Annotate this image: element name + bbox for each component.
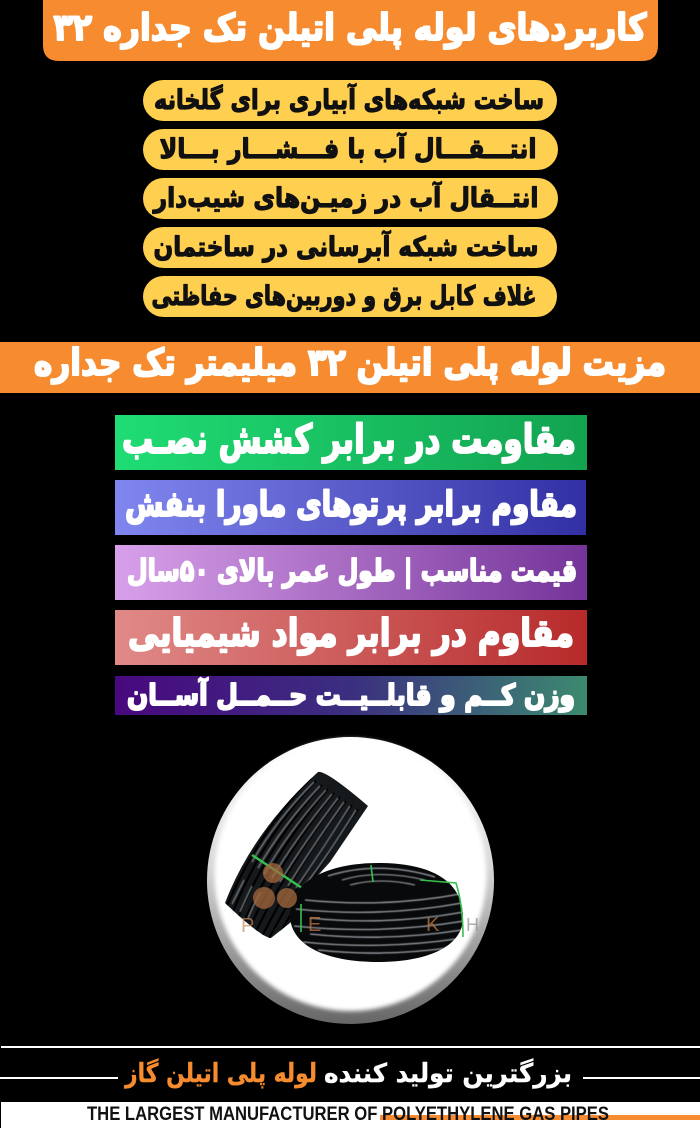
- product photo: pipe coils in round frame: [207, 737, 494, 1024]
- application pill 2: انتـــقـــال آب با فـــشـــار بـــالا: [160, 132, 536, 165]
- application pill 5: [143, 276, 557, 317]
- round bevelled frame: [207, 737, 494, 1024]
- advantage bar: red: [115, 610, 587, 665]
- list of applications: [143, 80, 558, 317]
- application pill 1: ساخت شبکه‌های آبیاری برای گلخانه: [154, 83, 544, 116]
- footer: English tagline strip: THE LARGEST MANUFACTURER OF POLYETHYLENE GAS PIPES: [87, 1104, 609, 1125]
- advantage bar: purple: قیمت مناسب | طول عمر بالای ۵۰سال: [127, 554, 577, 589]
- footer slogan in Persian: بزرگترین تولید کننده: [324, 1058, 572, 1089]
- list of advantages: [115, 415, 587, 715]
- application pill 3: [143, 178, 558, 219]
- advantage bar: indigo to teal: وزن کــم و قابلــیــت حــمــل آســان: [127, 677, 575, 712]
- footer slogan in Persian: [0, 1058, 700, 1089]
- title banner: applications: [43, 0, 658, 61]
- watermark logo: E: [308, 914, 321, 936]
- advantage bar: blue: [115, 480, 586, 535]
- application pill 3: انتــقال آب در زمیـن‌های شیب‌دار: [152, 181, 538, 214]
- application pill 2: [143, 129, 558, 170]
- advantage bar: purple: [115, 545, 587, 600]
- watermark logo: P: [241, 915, 254, 937]
- application pill 5: غلاف کابل برق و دوربین‌های حفاظتی: [152, 281, 536, 312]
- advantage bar: red: مقاوم در برابر مواد شیمیایی: [128, 611, 574, 656]
- green strap on left coil: [252, 855, 332, 890]
- application pill 4: [143, 227, 557, 268]
- application pill 4: ساخت شبکه آبرسانی در ساختمان: [154, 230, 538, 263]
- left tilted coil: [225, 772, 368, 938]
- watermark logo: H: [466, 915, 479, 935]
- footer slogan in Persian: لوله پلی اتیلن گاز: [123, 1058, 317, 1089]
- application pill 1: [143, 80, 557, 121]
- footer: top rule: [1, 1046, 700, 1048]
- footer: English tagline strip: [1, 1102, 700, 1128]
- watermark logo: K: [426, 914, 440, 936]
- watermark logo: [241, 863, 479, 937]
- advantage bar: green: مقاومت در برابر کشش نصـب: [122, 417, 576, 463]
- right flat coil: [290, 863, 464, 962]
- green straps on right coil: [301, 865, 463, 937]
- advantage bar: green: [115, 415, 587, 470]
- advantage bar: blue: مقاوم برابر پرتوهای ماورا بنفش: [125, 485, 577, 525]
